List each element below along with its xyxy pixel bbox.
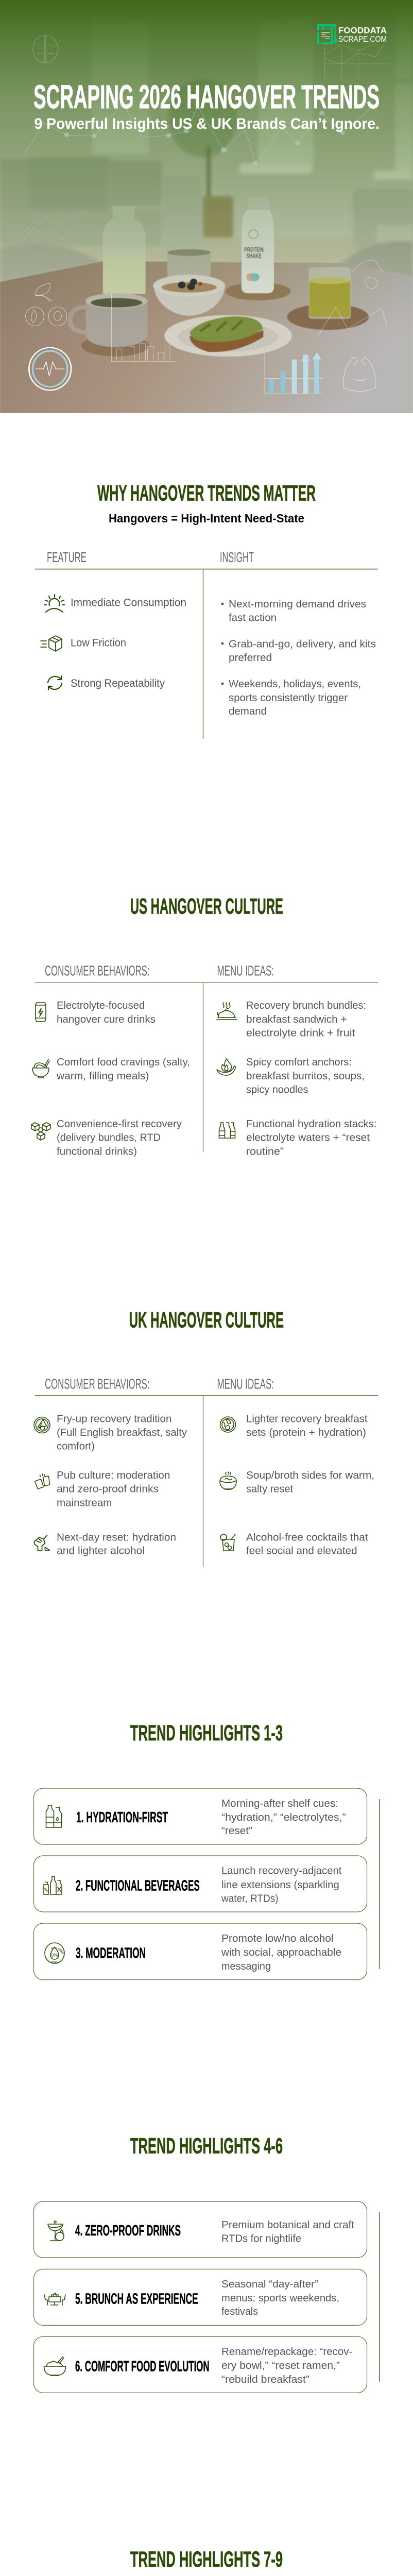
heading: TREND HIGHLIGHTS 4-6 [130, 2134, 283, 2159]
hero banner [0, 0, 413, 413]
description [221, 2279, 339, 2317]
overlay: growth bars [265, 352, 323, 394]
icon: alcohol free badge [44, 1942, 65, 1964]
card: functional beverages [34, 1856, 367, 1912]
card: moderation [33, 1923, 368, 1980]
description [221, 1866, 342, 1905]
description: water, RTDs) [221, 1893, 279, 1905]
description [221, 1798, 346, 1837]
overlay: brain icon [33, 36, 58, 63]
hero photo: breakfast table in a living room: SHAKE [246, 252, 262, 260]
hero subtitle: 9 Powerful Insights US & UK Brands Can’t Ignore. [34, 115, 380, 132]
icon: repeat arrows [48, 676, 62, 690]
card: hydration-first [34, 1788, 367, 1844]
section: uk hangover culture [34, 1308, 378, 1567]
behavior: comfort food [56, 1057, 190, 1082]
icon: hot roast meal [217, 1003, 237, 1020]
insight bullets: demand [229, 706, 267, 717]
icon: sunrise [44, 595, 64, 612]
description: Promote low/no alcohol [221, 1933, 334, 1944]
insight bullets: fast action [229, 613, 277, 624]
icon: mocktail glass [220, 1534, 235, 1551]
description [221, 1933, 341, 1972]
icon: flame and chili [217, 1059, 235, 1075]
card: hydration-first: 1. HYDRATION-FIRST [76, 1809, 168, 1826]
description: RTDs for nightlife [221, 2233, 301, 2245]
idea: spicy comfort: Spicy comfort anchors: [246, 1057, 352, 1068]
insight bullets: sports consistently trigger [229, 692, 348, 704]
description: Launch recovery-adjacent [221, 1866, 342, 1877]
overlay: strength icon [344, 357, 375, 392]
idea: spicy comfort [246, 1057, 365, 1096]
idea: functional hydration [246, 1118, 377, 1157]
idea: soup sides: salty reset [246, 1484, 293, 1495]
description: messaging [221, 1961, 271, 1972]
description: Seasonal “day-after” [221, 2279, 318, 2290]
overlay: mug chart [111, 293, 177, 361]
feature: strong repeatability: Strong Repeatability [71, 677, 165, 689]
idea: functional hydration: Functional hydration stacks: [246, 1118, 377, 1130]
behavior: convenience: Convenience-first recovery [57, 1118, 182, 1130]
icon: alcohol free badge: 0% [51, 1953, 58, 1958]
behavior: fry-up [57, 1414, 187, 1452]
description: Premium botanical and craft [221, 2219, 354, 2231]
description: festivals [221, 2306, 258, 2317]
column heading: consumer behaviors: CONSUMER BEHAVIORS: [45, 1376, 149, 1392]
behavior: electrolyte drinks [57, 1000, 156, 1025]
hero logo: FOODDATA [338, 26, 387, 35]
description: Rename/repackage: “recov- [221, 2346, 352, 2358]
icon: noodle bowl [32, 1059, 49, 1078]
idea: alcohol-free cocktails: feel social and elevated [246, 1546, 357, 1557]
insight bullets: Grab-and-go, delivery, and kits [229, 639, 376, 650]
idea: soup sides [246, 1470, 374, 1495]
behavior: convenience: functional drinks) [57, 1146, 137, 1157]
behavior: next-day reset [57, 1532, 176, 1557]
description: “reset” [221, 1825, 252, 1837]
description: line extensions (sparkling [221, 1879, 339, 1891]
icon: delivery box [41, 636, 62, 651]
behavior: pub culture [57, 1470, 170, 1509]
heading: TREND HIGHLIGHTS 1-3 [130, 1721, 283, 1745]
card: comfort food evolution [34, 2336, 367, 2393]
card: brunch as experience [34, 2269, 367, 2325]
idea: alcohol-free cocktails [246, 1532, 368, 1557]
card: functional beverages: 2. FUNCTIONAL BEVERAGES [76, 1877, 200, 1894]
idea: alcohol-free cocktails: Alcohol-free cocktails that [246, 1532, 368, 1543]
description: with social, approachable [221, 1947, 341, 1958]
overlay: vitals gauge [29, 348, 71, 390]
idea: lighter breakfast: sets (protein + hydration) [246, 1427, 366, 1438]
section: why hangover trends matter [35, 481, 378, 739]
icon: soup bowl [220, 1472, 236, 1489]
icon: light breakfast plate [220, 1417, 236, 1432]
section: trend highlights 4-6 [34, 2134, 379, 2393]
overlay: left line chart [22, 213, 84, 241]
icon: hand with glass [34, 1535, 49, 1551]
idea: spicy comfort: spicy noodles [246, 1084, 308, 1096]
idea: recovery brunch [246, 1000, 366, 1039]
icon: alcohol free badge: FREE [51, 1961, 59, 1964]
behavior: electrolyte drinks: hangover cure drinks [57, 1014, 156, 1025]
behavior: pub culture: and zero-proof drinks [57, 1484, 159, 1495]
behavior: fry-up: comfort) [57, 1440, 95, 1452]
icon: brunch table [44, 2293, 65, 2305]
overlay: right hydration icons [318, 260, 387, 336]
heading: US HANGOVER CULTURE [130, 894, 283, 919]
idea: recovery brunch: Recovery brunch bundles: [246, 1000, 366, 1011]
behavior: next-day reset: Next-day reset: hydration [57, 1532, 176, 1543]
description [221, 2346, 352, 2385]
behavior: next-day reset: and lighter alcohol [57, 1546, 145, 1557]
description: menus: sports weekends, [221, 2293, 339, 2304]
insight bullets: Weekends, holidays, events, [229, 679, 361, 690]
column heading: menu ideas: MENU IDEAS: [217, 962, 274, 978]
card: moderation: 3. MODERATION [76, 1945, 146, 1962]
idea: lighter breakfast [246, 1414, 368, 1438]
heading: TREND HIGHLIGHTS 7-9 [130, 2547, 283, 2572]
card: zero-proof drinks: 4. ZERO-PROOF DRINKS [75, 2223, 181, 2239]
hero logo [317, 24, 387, 44]
description: “hydration,” “electrolytes,” [221, 1812, 346, 1823]
description: ery bowl,” “reset ramen,” [221, 2360, 340, 2371]
icon: hydration bottles [219, 1123, 235, 1138]
behavior: convenience: (delivery bundles, RTD [57, 1132, 161, 1144]
feature: immediate consumption: Immediate Consumption [71, 597, 186, 609]
idea: recovery brunch: electrolyte drink + fruit [246, 1027, 355, 1039]
icon: alcohol free badge: ALCOHOL [51, 1947, 64, 1955]
insight bullets: Next-morning demand drives [229, 599, 366, 610]
section: us hangover culture [31, 894, 378, 1157]
insight bullets [221, 599, 376, 717]
column heading: menu ideas: MENU IDEAS: [217, 1376, 274, 1392]
icon: functional drinks [44, 1876, 62, 1894]
card: comfort food evolution: 6. COMFORT FOOD EVOLUTION [75, 2359, 210, 2375]
card: zero-proof drinks [34, 2201, 367, 2258]
feature: low friction: Low Friction [71, 637, 126, 649]
overlay: trend line [25, 104, 371, 165]
description [221, 2219, 354, 2245]
icon: pub cheers [35, 1474, 49, 1489]
overlay: small line chart [324, 40, 390, 78]
section: trend highlights 1-3 [33, 1721, 380, 1980]
icon: mocktail coupe [48, 2221, 64, 2241]
idea: soup sides: Soup/broth sides for warm, [246, 1470, 374, 1481]
behavior: convenience [57, 1118, 182, 1157]
icon: full english plate [34, 1417, 50, 1433]
heading: UK HANGOVER CULTURE [129, 1308, 284, 1332]
icon: delivery boxes [31, 1123, 50, 1140]
description: “rebuild breakfast” [221, 2374, 309, 2385]
idea: functional hydration: routine” [246, 1146, 284, 1157]
subheading: Hangovers = High-Intent Need-State [109, 512, 304, 525]
card: brunch as experience: 5. BRUNCH AS EXPERIENCE [75, 2291, 198, 2307]
description: Morning-after shelf cues: [221, 1798, 338, 1809]
column heading: feature: FEATURE [47, 549, 87, 565]
idea: functional hydration: electrolyte waters + “reset [246, 1132, 370, 1144]
insight bullets: preferred [229, 652, 272, 664]
behavior: fry-up: Fry-up recovery tradition [57, 1414, 172, 1425]
behavior: comfort food: Comfort food cravings (salty, [57, 1057, 190, 1068]
behavior: pub culture: mainstream [57, 1498, 112, 1509]
icon: electrolyte can [36, 1003, 46, 1022]
idea: spicy comfort: breakfast burritos, soups, [246, 1071, 365, 1082]
behavior: fry-up: (Full English breakfast, salty [57, 1427, 187, 1438]
hero photo: breakfast table in a living room [0, 0, 413, 413]
idea: recovery brunch: breakfast sandwich + [246, 1014, 347, 1025]
column heading: consumer behaviors: CONSUMER BEHAVIORS: [45, 962, 149, 978]
hero logo: SCRAPE.COM [338, 35, 387, 44]
behavior: electrolyte drinks: Electrolyte-focused [57, 1000, 145, 1011]
idea: lighter breakfast: Lighter recovery breakfast [246, 1414, 368, 1425]
behavior: comfort food: warm, filling meals) [56, 1071, 149, 1082]
overlay: health icons [26, 283, 67, 326]
icon: water bottles [46, 1805, 62, 1827]
column heading: insight: INSIGHT [220, 549, 254, 565]
icon: rice bowl [44, 2357, 66, 2376]
bottle label: PROTEIN [244, 246, 264, 253]
behavior: pub culture: Pub culture: moderation [57, 1470, 170, 1481]
